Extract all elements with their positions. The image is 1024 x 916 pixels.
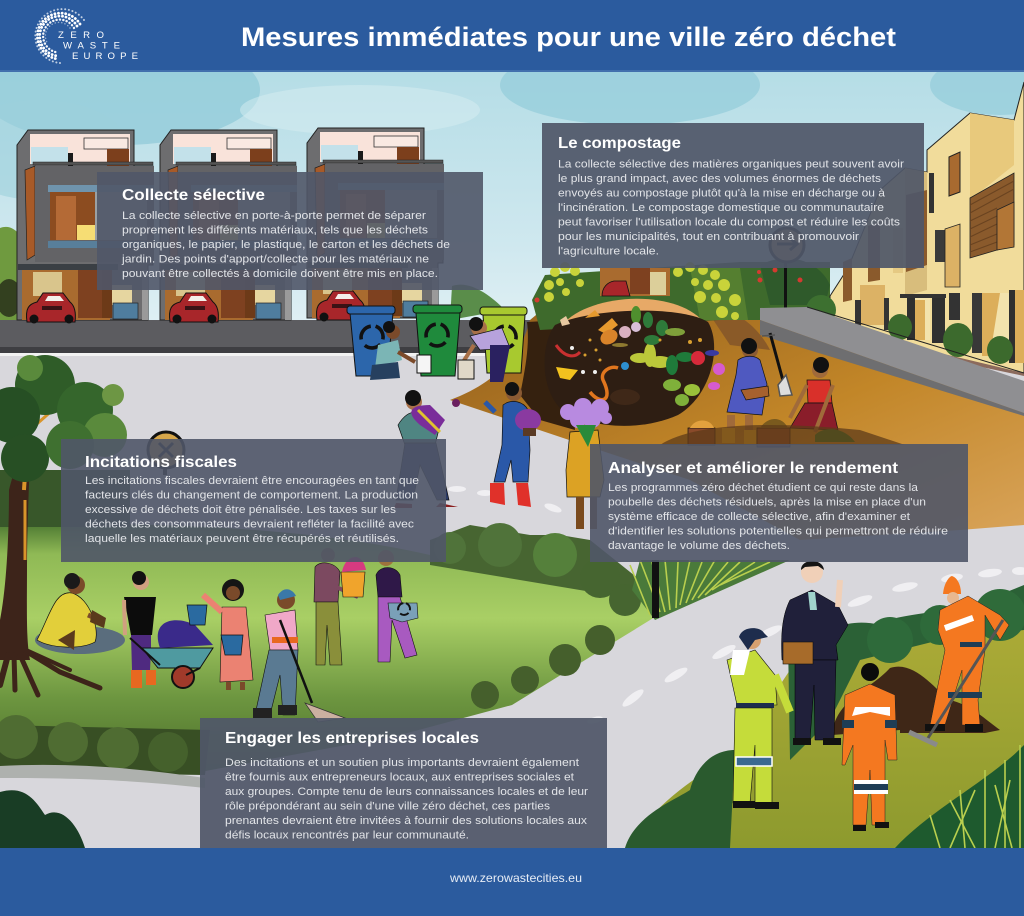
title: Mesures immédiates pour une ville zéro déchet (241, 22, 896, 52)
hedges lawn edges (0, 523, 641, 788)
panel: Le compostage: Le compostage (558, 135, 681, 152)
panel: Collecte sélective (97, 172, 483, 290)
panel: Incitations fiscales: facteurs clés du changement de comportement. La production (85, 490, 418, 502)
lawn (0, 524, 655, 772)
workers group (727, 561, 1009, 831)
panel: Engager les entreprises locales: Des incitations et un soutien plus importants devraient également (225, 757, 580, 769)
houses row (17, 128, 444, 324)
tall grass & pole (630, 560, 790, 620)
panel: Engager les entreprises locales (200, 718, 607, 848)
panel: Analyser et améliorer le rendement: Analyser et améliorer le rendement (608, 460, 898, 477)
panel: Engager les entreprises locales: Engager les entreprises locales (225, 730, 479, 747)
panel: Collecte sélective: La collecte sélective en porte-à-porte permet de séparer (122, 210, 426, 222)
grey pavement (0, 350, 1024, 848)
panel: Le compostage: pour les municipalités, tout en contribuant à promouvoir (558, 231, 859, 243)
women at compost (660, 333, 905, 447)
logo: Zero Waste Europe: WASTE (63, 40, 120, 52)
panel: Analyser et améliorer le rendement: système efficace de collecte sélective, afin d'examiner et (608, 511, 911, 523)
dark bush bottom left (0, 790, 85, 848)
panel: Collecte sélective: Collecte sélective (122, 187, 265, 204)
panel: Collecte sélective: pouvant être collectés à domicile doivent être mis en place. (122, 268, 438, 280)
people on the path (394, 382, 612, 529)
panel: Le compostage (542, 123, 924, 268)
panel: Analyser et améliorer le rendement: poubelle des déchets résiduels, après la mise en place d'un (608, 496, 926, 508)
people at bins (370, 317, 510, 382)
sky (0, 35, 1024, 361)
panel: Engager les entreprises locales: prenantes devraient être invitées à fournir des solutions locales aux (225, 815, 587, 827)
road dashes (448, 486, 1024, 725)
panel: Le compostage: l'agriculture locale. (558, 246, 659, 258)
panel: Incitations fiscales (61, 439, 446, 562)
panel: Analyser et améliorer le rendement: davantage le volume des déchets. (608, 540, 790, 552)
raised sidewalk (760, 307, 1024, 416)
right green with mound (625, 585, 1024, 848)
road sign: arrow (770, 228, 804, 308)
panel: Le compostage: l'incinération. Le compostage domestique ou communautaire (558, 202, 884, 214)
panel: Analyser et améliorer le rendement (590, 444, 968, 562)
logo: Zero Waste Europe: EUROPE (72, 51, 138, 62)
panel: Engager les entreprises locales: être fournis aux entrepreneurs locaux, aux entreprises sociales et (225, 772, 575, 784)
footer bar (0, 848, 1024, 916)
panel: Incitations fiscales: déchets des consommateurs devraient refléter la facilité avec (85, 518, 414, 530)
panel: Analyser et améliorer le rendement: Les programmes zéro déchet étudient ce qui reste dans la (608, 482, 919, 494)
logo: Zero Waste Europe: ZERO (58, 30, 104, 41)
panel: Incitations fiscales: Incitations fiscales (85, 454, 237, 471)
sign: cross (148, 432, 184, 475)
buildings right (806, 82, 1024, 376)
compost mound (545, 299, 725, 426)
recycling bins (347, 305, 527, 376)
panel: Le compostage: le plus grand impact, avec des volumes énormes de déchets (558, 173, 881, 185)
panel: Analyser et améliorer le rendement: d'identifier les solutions potentielles qui permettront de réduire (608, 526, 948, 538)
footer url: www.zerowastecities.eu (449, 871, 582, 885)
people on the lawn (35, 548, 418, 722)
header bar (0, 0, 1024, 72)
panel: Engager les entreprises locales: défis locaux rencontrés par leur communauté. (225, 830, 469, 842)
trees behind compost (532, 258, 830, 330)
panel: Incitations fiscales: laquelle les matériaux peuvent être récupérés et réutilisés. (85, 533, 399, 545)
panel: Collecte sélective: jardin. Des points d'apport/collecte pour les matériaux ne (121, 254, 429, 266)
panel: Engager les entreprises locales: rôle prépondérant au sein d'une ville zéro déchet, ces parties (225, 800, 550, 812)
panel: Le compostage: envoyés au compostage plutôt qu'à la mise en décharge ou à (558, 188, 886, 200)
tree (0, 355, 130, 695)
panel: Incitations fiscales: Les incitations fiscales devraient être encouragées en tant que (85, 475, 419, 487)
panel: Engager les entreprises locales: aux groupes. Compte tenu de leurs connaissances locales et de leur (225, 786, 588, 798)
panel: Collecte sélective: proprement les différents matériaux, tels que les déchets (122, 224, 428, 236)
panel: Le compostage: peut favoriser l'utilisation locale du compost et réduire les coûts (558, 216, 900, 228)
panel: Le compostage: La collecte sélective des matières organiques peut souvent avoir (558, 158, 904, 170)
logo: Zero Waste Europe (35, 9, 138, 63)
panel: Incitations fiscales: excessive de déchets doit être pénalisée. Les taxes sur les (85, 504, 396, 516)
panel: Collecte sélective: organiques, le papier, le plastique, le carton et les déchets de (122, 239, 450, 251)
street behind houses (0, 227, 570, 356)
compost ground (450, 295, 1024, 540)
